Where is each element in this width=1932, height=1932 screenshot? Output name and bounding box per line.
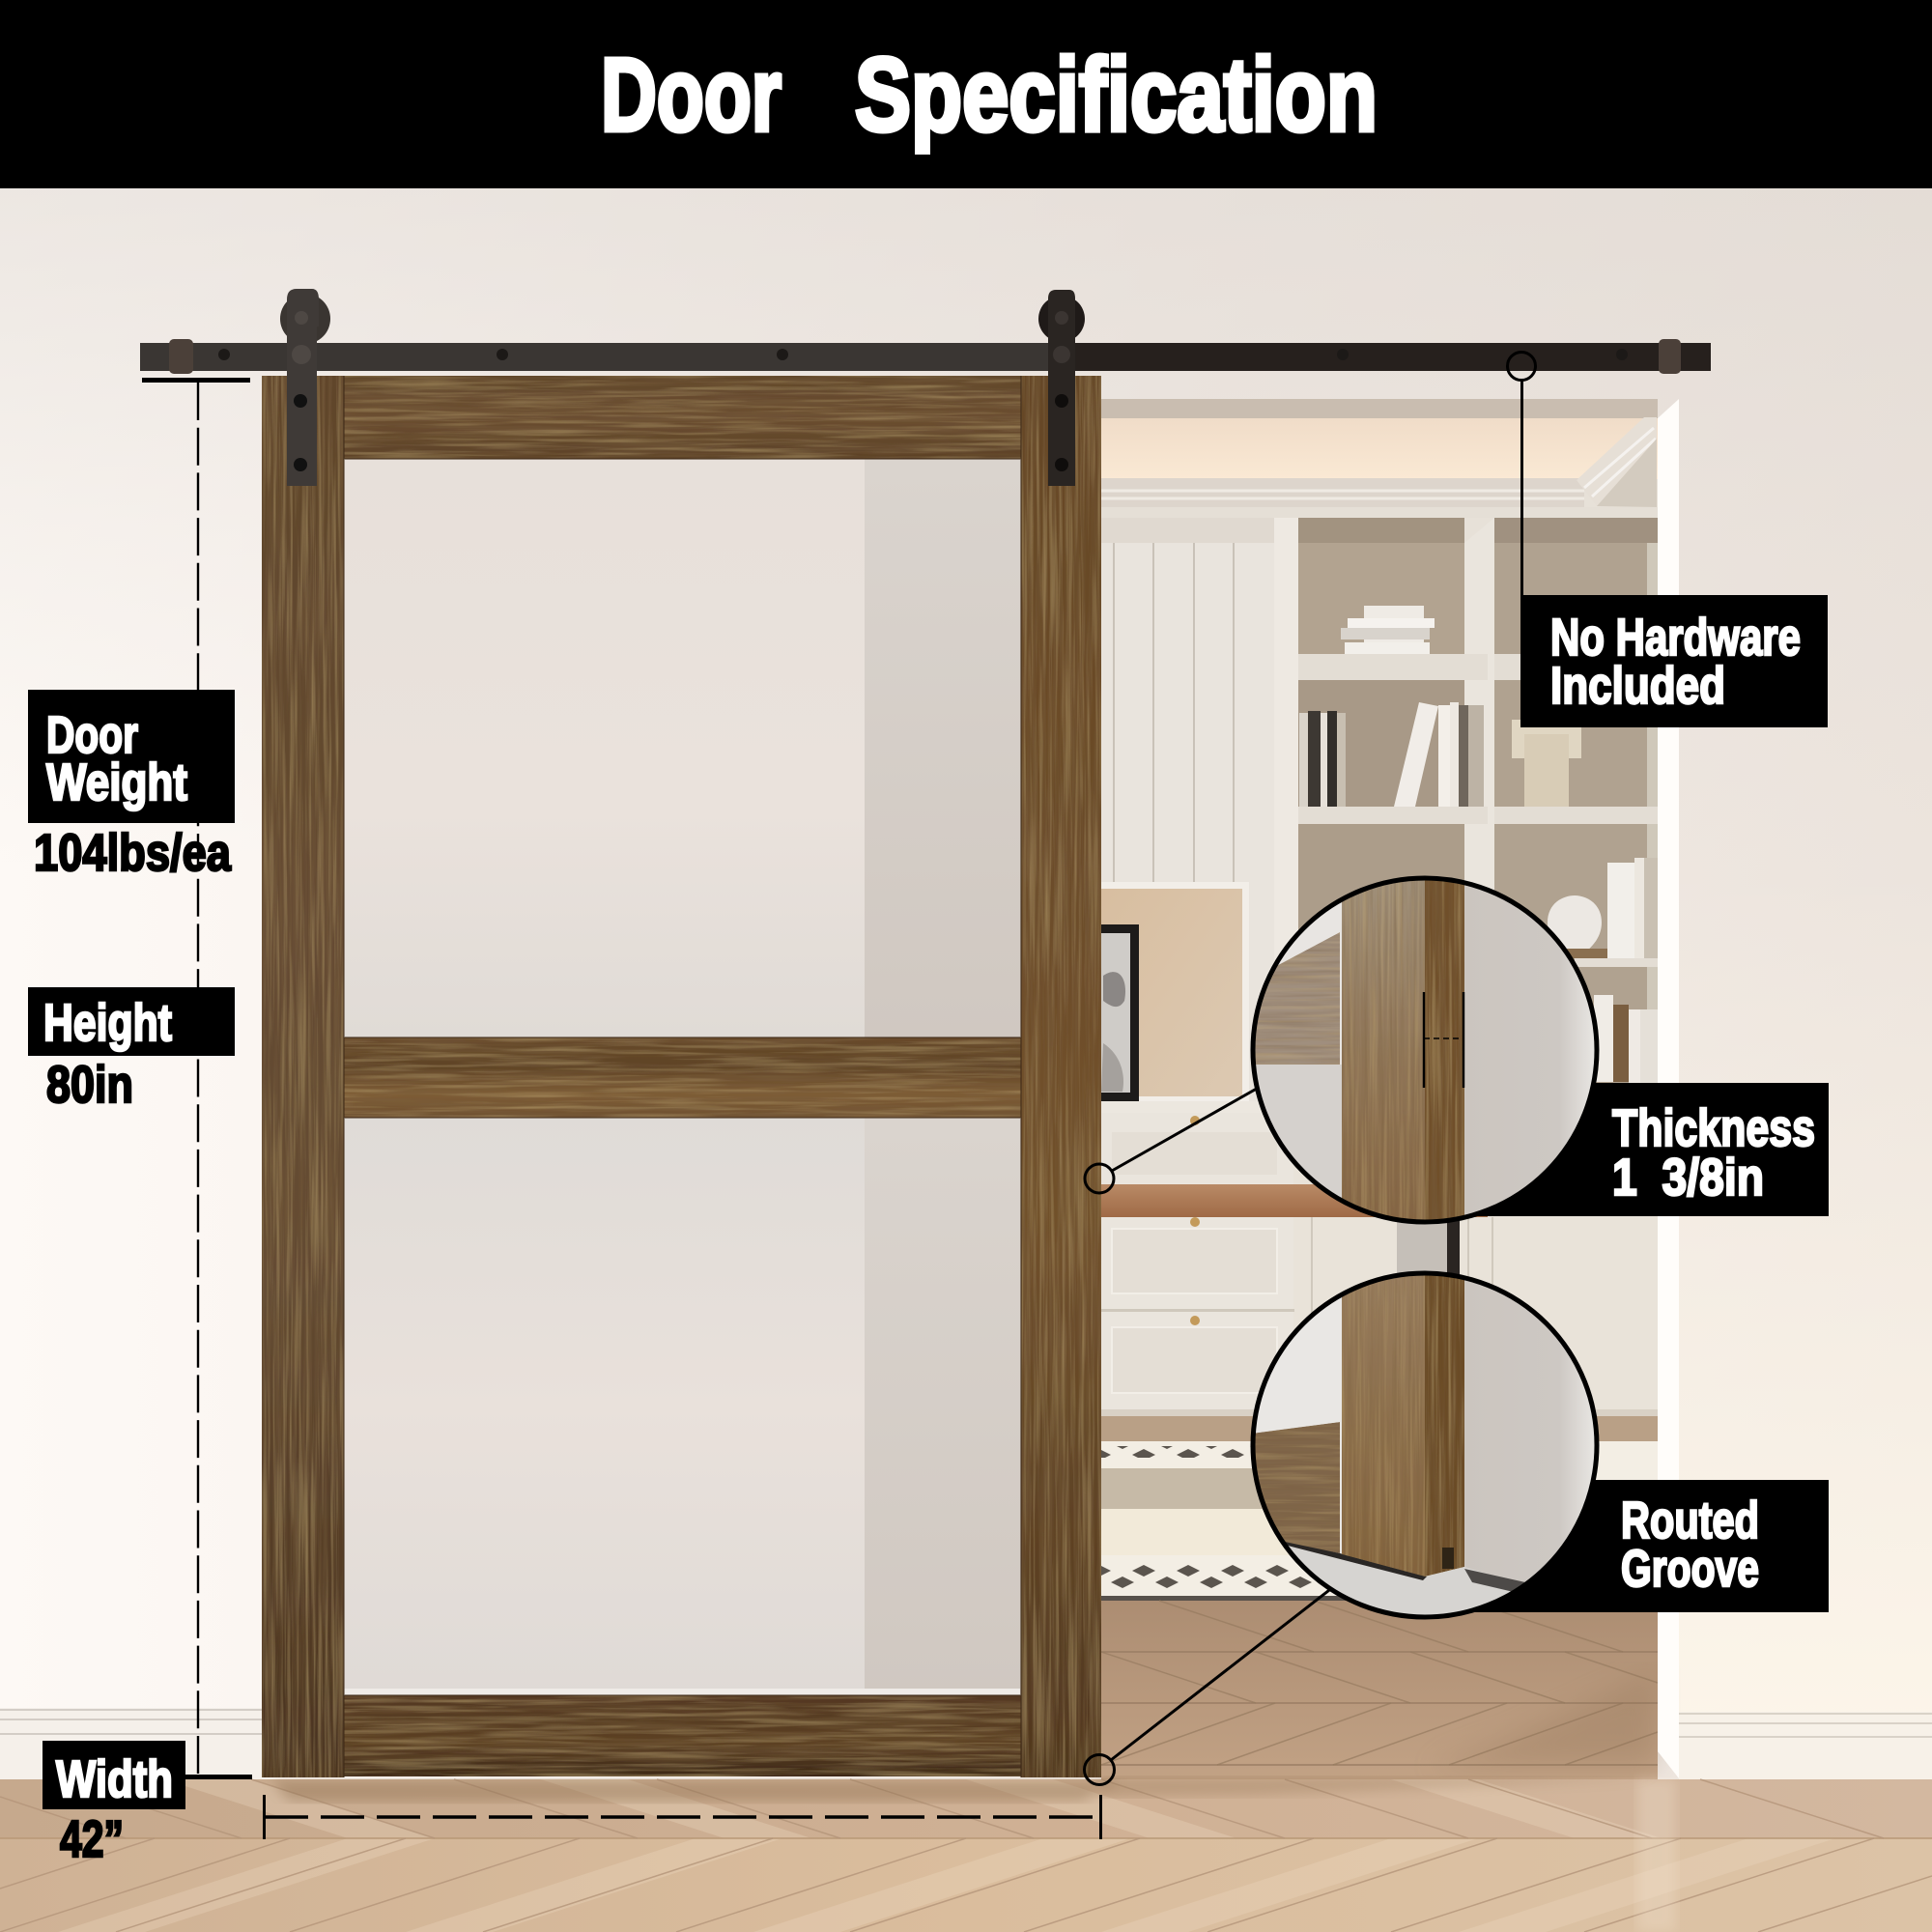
thickness marks	[1424, 992, 1463, 1088]
width dimension line	[263, 1795, 1102, 1839]
label: width: Width	[56, 1750, 173, 1808]
label: door weight: Weight	[46, 753, 187, 811]
callout: routed groove	[1449, 1480, 1829, 1612]
title	[601, 36, 1378, 153]
header bar	[0, 0, 1932, 188]
door	[262, 376, 1101, 1777]
left stile	[262, 376, 344, 1777]
rail end stops	[169, 339, 1681, 374]
books on second shelf	[1299, 702, 1484, 807]
lighter planks	[58, 1779, 1835, 1932]
glass panels	[344, 458, 1021, 1696]
cabinets and desk	[1101, 1101, 1660, 1416]
back room floor and rug	[1101, 1416, 1658, 1601]
sculpture	[1512, 720, 1581, 807]
value: width: 42”	[60, 1810, 124, 1868]
label: height: Height	[43, 994, 172, 1052]
callout: routed groove: Routed	[1621, 1492, 1759, 1549]
vase and books on third shelf	[1548, 858, 1658, 1087]
magnifier: routed groove	[1251, 1271, 1604, 1623]
top rail	[344, 376, 1021, 459]
crown molding	[1101, 417, 1658, 518]
title: Door	[601, 36, 781, 153]
height dimension line	[142, 378, 252, 1779]
framed art	[1101, 882, 1249, 1102]
ceiling glow	[1101, 418, 1658, 479]
soffit	[1101, 399, 1658, 418]
callout: thickness	[1449, 1083, 1829, 1216]
right door jamb	[1658, 399, 1679, 1778]
paneled wall	[1101, 518, 1275, 1117]
pointer: thickness	[1085, 1086, 1262, 1193]
callout: no hardware	[1507, 352, 1828, 727]
callout: no hardware: Included	[1550, 657, 1725, 715]
value: height: 80in	[46, 1056, 133, 1114]
books on top shelf	[1341, 606, 1435, 654]
right hanger	[1038, 290, 1085, 486]
bottom rail	[344, 1695, 1021, 1776]
callout: no hardware: No Hardware	[1550, 609, 1801, 667]
pointer: groove	[1084, 1587, 1333, 1785]
callout: thickness: 1 3/8in	[1612, 1149, 1764, 1207]
baseboards	[0, 1708, 1932, 1779]
value: door weight: 104lbs/ea	[34, 824, 232, 882]
sliding rail	[140, 339, 1711, 374]
callout: thickness: Thickness	[1612, 1099, 1815, 1157]
magnifier: door edge thickness	[1251, 876, 1600, 1224]
left hanger	[280, 289, 330, 486]
label: height	[28, 987, 235, 1056]
doorway room interior	[1101, 399, 1660, 1780]
middle rail	[344, 1037, 1021, 1118]
title: Specification	[855, 36, 1378, 153]
callout: routed groove: Groove	[1621, 1540, 1759, 1598]
doorway floor	[1101, 1601, 1658, 1780]
label: door weight	[28, 690, 235, 823]
rail bolts	[218, 349, 1628, 360]
right stile	[1021, 376, 1101, 1777]
label: door weight: Door	[46, 706, 138, 764]
hardwood floor	[0, 1777, 1932, 1932]
bookcase	[1274, 518, 1658, 1122]
